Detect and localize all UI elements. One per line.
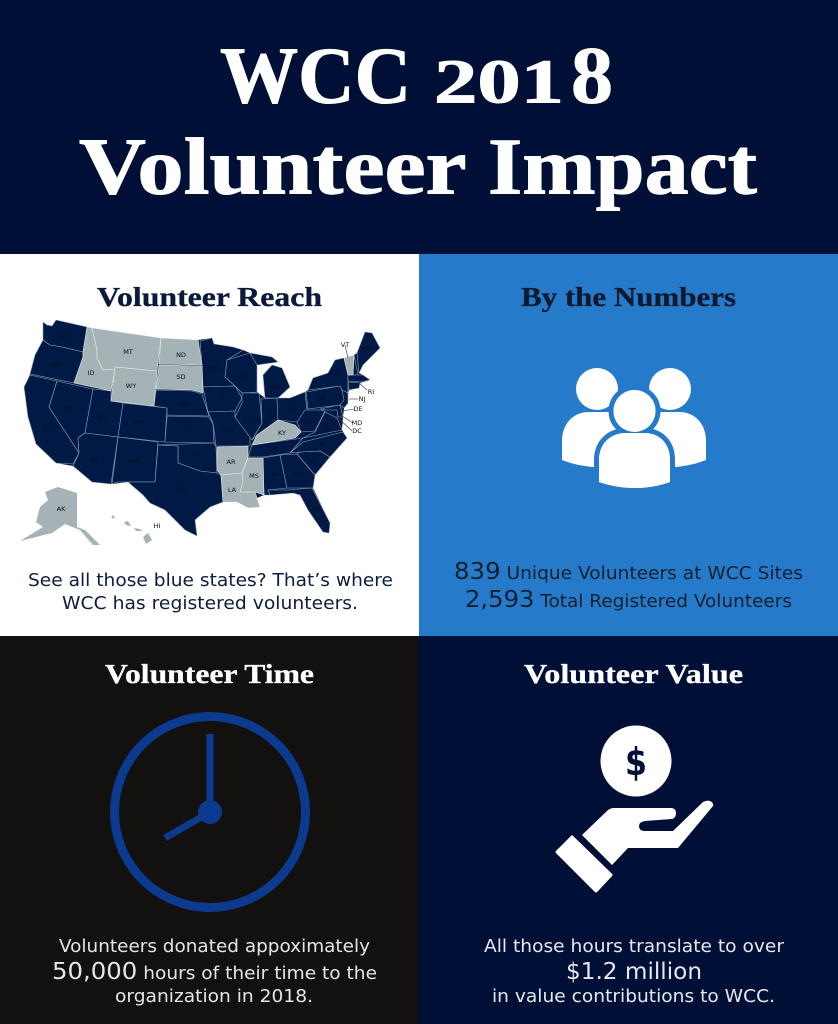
panel: volunteer reach <box>0 254 419 636</box>
text: value contributions: All those hours translate to over <box>484 937 785 957</box>
map: US states: OR <box>49 361 59 369</box>
map: US states: IL <box>248 412 254 420</box>
title line 2: Impact <box>488 124 757 212</box>
map: US states: LA <box>228 486 237 494</box>
map: US states: AR <box>227 458 236 466</box>
map: US states: WY <box>126 382 136 390</box>
map: US states: AZ <box>90 456 99 464</box>
map: US states: DC <box>352 427 362 435</box>
text: hours donated <box>52 937 377 1007</box>
map: US states: SD <box>176 373 186 381</box>
map: US states: HI <box>154 522 160 530</box>
text: hours donated: organization in 2018. <box>115 987 313 1007</box>
map: US states: VA <box>321 423 330 431</box>
map: US states: AL <box>271 470 279 478</box>
map: US states: IN <box>267 412 274 420</box>
map: US states: UT <box>98 413 106 421</box>
text: value contributions: in value contributions to WCC. <box>492 987 775 1007</box>
map: US states: ID <box>88 369 94 377</box>
map: US states: WV <box>303 418 314 426</box>
map: US states: RI <box>368 388 374 396</box>
map: US states: MI <box>272 383 280 391</box>
panel: by the numbers <box>419 254 838 636</box>
icon: hand holding coin <box>557 726 713 891</box>
text: value contributions <box>484 937 785 1007</box>
map: US states: CO <box>134 419 144 427</box>
map: US states: NY <box>333 371 341 379</box>
text: blue states caption: WCC has registered volunteers. <box>62 594 358 614</box>
title line 1: 8 <box>571 30 613 120</box>
map: US states: MO <box>223 427 233 435</box>
map: US states: MN <box>209 364 219 372</box>
map: US states: CA <box>42 423 52 431</box>
map: US states: OK <box>192 451 202 459</box>
text: value contributions: $1.2 million <box>566 959 702 985</box>
map: US states: DE <box>353 405 363 413</box>
map: US states: ME <box>361 345 371 353</box>
icon: group of people <box>562 368 706 488</box>
map: US states: NJ <box>359 395 365 403</box>
map: US states: MS <box>249 472 259 480</box>
map: US states: KS <box>184 425 192 433</box>
map: US states: NC <box>319 440 329 448</box>
map: US states: PA <box>318 395 327 403</box>
map: US states: OH <box>286 405 296 413</box>
map: US states: VT <box>341 341 349 349</box>
map: US states: MT <box>123 348 133 356</box>
map: US states: NV <box>64 404 74 412</box>
heading: volunteer value: Volunteer Value <box>524 659 743 689</box>
map: US states: MD <box>352 419 362 427</box>
map: US states: NE <box>180 400 188 408</box>
map: US states: FL <box>313 505 321 513</box>
title line 2: Volunteer <box>79 124 465 212</box>
text: volunteer counts: 2,593 Total Registered Volunteers <box>465 587 792 613</box>
text: volunteer counts: 839 Unique Volunteers at WCC Sites <box>454 559 803 585</box>
text: blue states caption: See all those blue states? That’s where <box>28 571 393 591</box>
map: US states: GA <box>294 470 304 478</box>
map: US states: WA <box>59 332 70 340</box>
map: US states: IA <box>219 394 226 402</box>
heading: volunteer reach: Volunteer Reach <box>97 282 322 312</box>
map: US states <box>20 320 380 545</box>
icon: clock <box>114 716 306 908</box>
map: US states: AK <box>57 505 66 513</box>
Alaska <box>20 487 100 545</box>
text: hours donated: 50,000 hours of their time to the <box>52 959 377 985</box>
icon: hand holding coin: $ <box>625 740 647 784</box>
title line 1: WCC <box>220 32 411 120</box>
map: US states: TN <box>268 445 278 453</box>
map: US states: ND <box>176 351 186 359</box>
map: US states: WI <box>240 373 248 381</box>
text: blue states caption <box>28 571 393 614</box>
text: volunteer counts <box>454 559 803 613</box>
map: US states: SC <box>310 457 319 465</box>
panel: volunteer time <box>0 636 419 1024</box>
Hawaii <box>112 516 152 544</box>
heading: by the numbers: By the Numbers <box>521 282 736 312</box>
map: US states: NM <box>128 457 138 465</box>
map: US states: KY <box>278 429 286 437</box>
panel: title banner <box>0 0 838 254</box>
heading: volunteer time: Volunteer Time <box>105 659 314 689</box>
map: US states: TX <box>177 485 187 493</box>
title line 1: 201 <box>434 48 564 116</box>
text: hours donated: Volunteers donated appoximately <box>59 937 370 957</box>
panel: volunteer value <box>419 636 838 1024</box>
